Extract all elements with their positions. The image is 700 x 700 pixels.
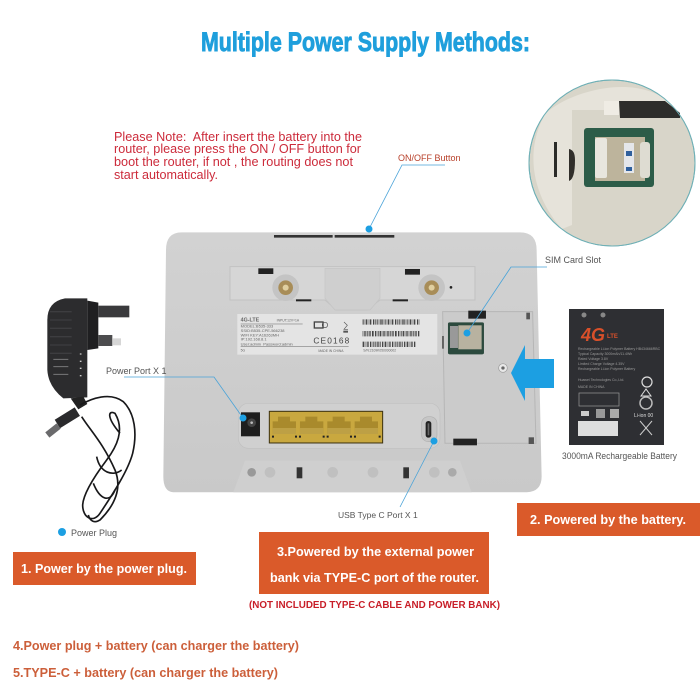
on/off button: [274, 235, 394, 238]
method 4 text: 4.Power plug + battery (can charger the battery): [13, 638, 299, 653]
battery fine print: Rechargeable Li-ion Polymer Battery HB434666RBC: [578, 347, 661, 351]
callout: usb type-c port: [338, 438, 438, 520]
battery fine print: Huawei Technologies Co.,Ltd.: [578, 378, 624, 382]
battery: Li-ion 00: [634, 413, 653, 419]
battery fine print: Typical Capacity 3000mAh/11.4Wh: [578, 352, 632, 356]
usb type-c port: [422, 417, 437, 442]
bottom vents: [247, 467, 457, 478]
product label: IP:192.168.8.1: [241, 337, 267, 342]
battery logo: 4G: [580, 325, 605, 345]
router body: [163, 232, 542, 492]
callout: power port: Power Port X 1: [106, 366, 167, 376]
method 3 box: 3.Powered by the external power: [277, 544, 474, 559]
power port: [241, 412, 260, 436]
callout: on/off button: [366, 153, 461, 232]
product label: 4G-LTE: [241, 317, 260, 323]
product label: WIFI KEY:A16263MH: [241, 332, 279, 337]
method 3 box: [259, 532, 489, 594]
power adapter: [47, 298, 135, 522]
battery fine print: [578, 347, 661, 389]
callout: on/off button: ON/OFF Button: [398, 153, 461, 163]
method 1 box: [13, 552, 196, 585]
note text: boot the router, if not , the routing does not: [114, 155, 354, 169]
note text: start automatically.: [114, 168, 218, 182]
ethernet ports: [269, 411, 383, 443]
battery fine print: MADE IN CHINA: [578, 385, 605, 389]
battery caption: 3000mA Rechargeable Battery: [562, 451, 677, 461]
method 2 box: 2. Powered by the battery.: [530, 512, 686, 527]
note text: Please Note: After insert the battery into the: [114, 130, 362, 144]
battery fine print: Rechargeable Li-ion Polymer Battery: [578, 367, 635, 371]
antenna recess: [230, 267, 475, 310]
note text: router, please press the ON / OFF button for: [114, 142, 361, 156]
callout: SIM card slot: SIM Card Slot: [545, 255, 602, 265]
battery fine print: Rated Voltage 3.8V: [578, 357, 609, 361]
product label: MADE IN CHINA: [318, 349, 344, 353]
title: Multiple Power Supply Methods:: [201, 27, 530, 57]
battery: [569, 309, 664, 445]
inset: SIM slot close-up: [529, 80, 695, 246]
method 1 box: 1. Power by the power plug.: [21, 561, 187, 576]
callout: SIM card slot: [464, 255, 602, 336]
product label: CE0168: [313, 335, 350, 345]
method 5 text: 5.TYPE-C + battery (can charger the battery): [13, 665, 278, 680]
battery: LTE: [607, 334, 618, 340]
product label: SSID:B535-CPE-566238: [241, 328, 285, 333]
barcodes: [363, 322, 419, 344]
battery bay: [442, 311, 536, 445]
product label: MODEL:B535-333: [241, 323, 274, 328]
blue arrow: [511, 345, 554, 401]
ports recess: [238, 403, 440, 448]
product label: 5G: [241, 348, 246, 352]
method 3 box: bank via TYPE-C port of the router.: [270, 570, 479, 585]
antenna connectors: [272, 274, 452, 301]
battery fine print: Limited Charge Voltage 4.35V: [578, 362, 625, 366]
not included note: (NOT INCLUDED TYPE-C CABLE AND POWER BANK): [249, 600, 500, 611]
product label: User:admin Password:admin: [241, 341, 293, 346]
product label: INPUT:12V=1A: [277, 318, 300, 322]
method 2 box: [517, 503, 700, 536]
power plug legend: Power Plug: [71, 528, 117, 538]
note text: [114, 130, 362, 182]
callout: usb type-c port: USB Type C Port X 1: [338, 510, 418, 520]
product label: [237, 314, 437, 355]
callout: power port: [106, 366, 246, 422]
router: [163, 232, 542, 492]
product label: S/N:2109K050000002: [363, 348, 396, 352]
